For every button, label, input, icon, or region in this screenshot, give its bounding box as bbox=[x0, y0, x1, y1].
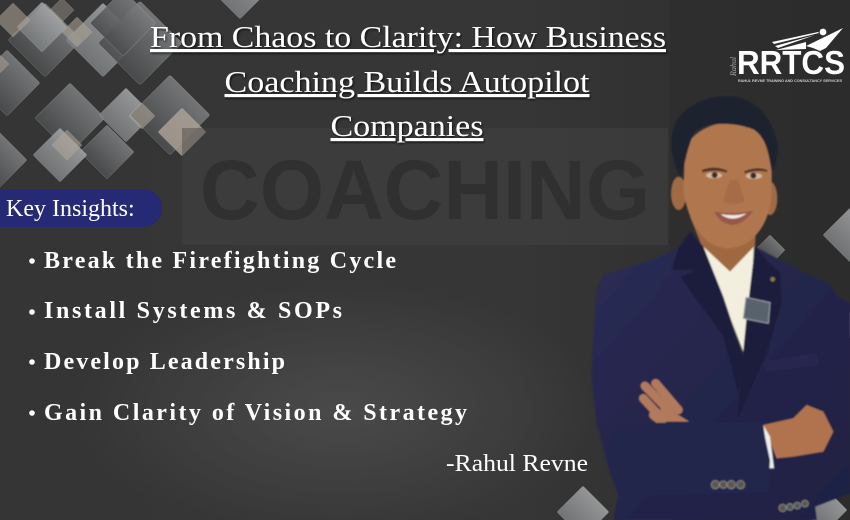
shirt bbox=[702, 245, 754, 357]
nose shadow bbox=[723, 180, 745, 204]
backdrop word: COACHING bbox=[200, 143, 650, 237]
title bbox=[150, 19, 666, 143]
hair bbox=[671, 96, 778, 178]
neck bbox=[690, 213, 757, 277]
eyes bbox=[706, 172, 762, 179]
right hand bbox=[763, 405, 833, 458]
logo signature: Rahul bbox=[729, 56, 738, 77]
author signature: -Rahul Revne bbox=[446, 451, 588, 477]
jacket pocket bbox=[765, 353, 818, 372]
coaching backdrop panel bbox=[182, 128, 668, 245]
logo: RRTCS bbox=[729, 28, 845, 83]
eyebrows bbox=[702, 168, 767, 173]
insight 2: Install Systems & SOPs bbox=[44, 298, 342, 324]
face bbox=[683, 122, 772, 248]
jacket lapels bbox=[672, 232, 782, 420]
left hand bbox=[643, 383, 683, 422]
title: Coaching Builds Autopilot bbox=[224, 64, 590, 99]
logo wordmark: RRTCS bbox=[737, 44, 845, 81]
logo tagline: RAHUL REVNE TRAINING AND CONSULTANCY SERVICES bbox=[738, 79, 842, 83]
title: Companies bbox=[330, 108, 484, 143]
mouth bbox=[714, 211, 753, 225]
ears bbox=[671, 177, 777, 215]
portrait of speaker bbox=[592, 96, 850, 520]
lapel microphone bbox=[743, 297, 770, 323]
front sleeve bbox=[605, 422, 770, 497]
logo swoosh bbox=[772, 28, 843, 51]
key insights list bbox=[29, 248, 467, 426]
shirt cuff bbox=[763, 425, 774, 468]
key insights pill: Key Insights: bbox=[6, 196, 135, 222]
lapel pin bbox=[770, 277, 775, 282]
key insights pill bbox=[0, 189, 162, 227]
jacket bbox=[592, 232, 850, 520]
sleeve buttons bbox=[711, 481, 808, 512]
title: From Chaos to Clarity: How Business bbox=[150, 19, 666, 54]
insight 1: Break the Firefighting Cycle bbox=[44, 248, 396, 274]
insight 4: Gain Clarity of Vision & Strategy bbox=[44, 400, 467, 426]
teeth bbox=[721, 213, 747, 219]
insight 3: Develop Leadership bbox=[44, 349, 285, 375]
